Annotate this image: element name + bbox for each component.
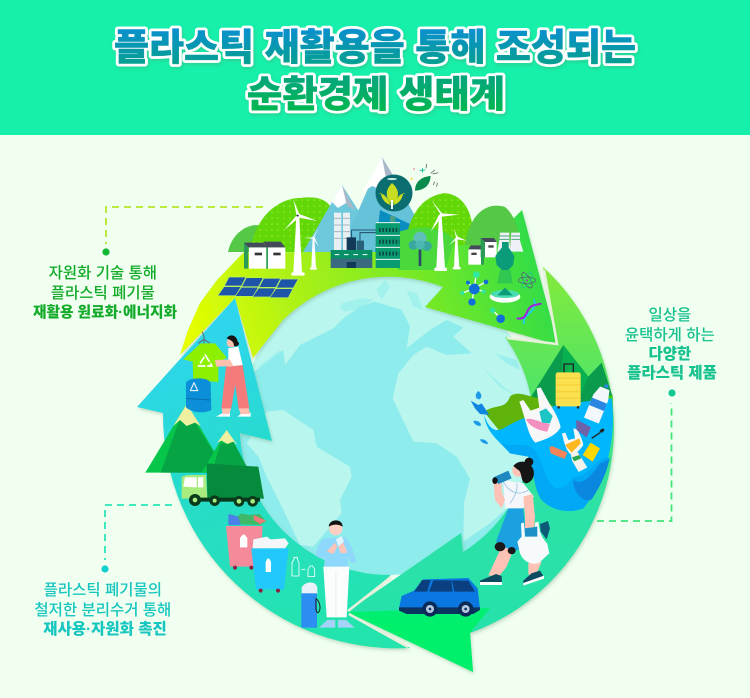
factory <box>331 213 377 268</box>
arrow segment: products (green to teal) <box>347 267 614 672</box>
hanger <box>198 332 210 343</box>
wind turbines left <box>284 199 319 276</box>
pink bin <box>226 526 263 567</box>
woman pants <box>221 365 249 409</box>
label: plastic products: 일상을 <box>648 306 691 324</box>
ground scene: solar panels <box>218 277 298 298</box>
bag with bottles <box>301 582 320 628</box>
spoon <box>592 433 600 438</box>
yellow container <box>583 443 600 462</box>
icon: leaf with sparkles <box>410 164 438 191</box>
shopping bag <box>517 522 549 564</box>
sea <box>484 398 613 511</box>
left scene: mountains and truck <box>145 404 264 507</box>
label: resource recovery: 플라스틱 폐기물 <box>51 284 155 302</box>
head <box>227 338 236 347</box>
wind turbines right and tree <box>409 199 467 271</box>
label: separate collection <box>34 505 176 638</box>
panel: recycling cycle arrow ring <box>137 210 614 672</box>
label: resource recovery: 재활용 원료화·에너지화 <box>33 303 178 321</box>
hills right <box>405 193 473 245</box>
tall green building <box>376 216 400 268</box>
recycling bins <box>226 513 315 593</box>
arrow head bright green base <box>347 608 490 672</box>
bottle purple <box>576 420 591 437</box>
woman with bag and can <box>480 458 550 586</box>
flask <box>495 242 514 270</box>
mountains <box>530 345 613 410</box>
hills left <box>228 225 290 252</box>
truck cab <box>182 475 207 499</box>
large plastic bag <box>519 387 561 443</box>
buildings and chemical plant right <box>460 233 541 324</box>
sea dark wave <box>493 433 610 511</box>
sweater <box>316 537 356 567</box>
car <box>399 578 480 617</box>
truck wheels <box>189 494 258 507</box>
plastic bottle <box>584 381 614 424</box>
mountain two <box>340 157 423 252</box>
can <box>493 471 512 484</box>
icon: sprout badge <box>376 174 412 212</box>
bottle to recycled icon <box>292 557 315 577</box>
recycled t-shirt <box>183 343 227 382</box>
head and hair <box>512 465 524 477</box>
small mountain <box>202 430 250 473</box>
title: 순환경제 생태계 <box>247 74 505 115</box>
backpack <box>186 378 211 412</box>
header band <box>0 0 750 135</box>
suitcase <box>556 364 581 409</box>
arms <box>493 482 505 508</box>
atom <box>518 271 536 289</box>
molecule <box>460 271 488 306</box>
feet <box>216 413 251 417</box>
title: 순환경제 생태계 <box>247 74 505 115</box>
title: 플라스틱 재활용을 통해 조성되는 <box>114 27 636 68</box>
big mountain <box>145 404 227 473</box>
label: resource recovery <box>33 207 263 321</box>
arrow edge highlights <box>348 270 557 647</box>
small molecule <box>490 308 505 323</box>
splash drops <box>471 391 489 444</box>
truck cargo <box>207 463 264 499</box>
title <box>114 27 636 115</box>
label: plastic products: 윤택하게 하는 <box>625 326 715 344</box>
cooling towers <box>497 233 511 252</box>
label: separate collection: 재사용·자원화 촉진 <box>43 620 167 638</box>
person holding bottle <box>301 520 356 628</box>
left scene: woman with recycled shirt and backpack <box>183 332 251 417</box>
dna <box>517 299 541 324</box>
label: resource recovery: 자원화 기술 통해 <box>49 264 157 282</box>
pants <box>323 567 349 617</box>
orange bottle <box>549 446 567 459</box>
label: separate collection: 철저한 분리수거 통해 <box>34 601 171 619</box>
arrow segment: resource recovery (lime) <box>180 210 558 358</box>
arrow segment: collection (cyan to teal) <box>137 298 410 648</box>
arm <box>215 359 233 367</box>
label: plastic products: 플라스틱 제품 <box>627 363 717 382</box>
buildings with solar roofs left <box>244 242 285 269</box>
mountain one <box>303 185 385 252</box>
globe <box>240 276 530 575</box>
trash on blue bin <box>253 537 289 548</box>
legs <box>488 547 513 577</box>
green hill <box>484 394 560 432</box>
trash on pink bin <box>228 513 266 525</box>
head <box>329 522 342 535</box>
tree <box>409 232 432 266</box>
right mountains and sea scene <box>471 345 614 511</box>
back hills and mountains on top <box>228 157 520 270</box>
small plastic bag <box>562 428 583 455</box>
houses <box>468 249 481 265</box>
skirt <box>496 508 528 552</box>
white bottle <box>571 452 587 472</box>
blue bin <box>251 548 289 589</box>
powder dish <box>490 291 520 303</box>
label: plastic products <box>597 306 719 521</box>
label: separate collection: 플라스틱 폐기물의 <box>44 581 162 599</box>
title: 플라스틱 재활용을 통해 조성되는 <box>114 27 636 68</box>
hands and bottle <box>336 536 344 547</box>
shoes <box>480 574 502 585</box>
woman shirt <box>228 347 243 367</box>
body <box>503 480 534 510</box>
label: plastic products: 다양한 <box>648 345 691 363</box>
